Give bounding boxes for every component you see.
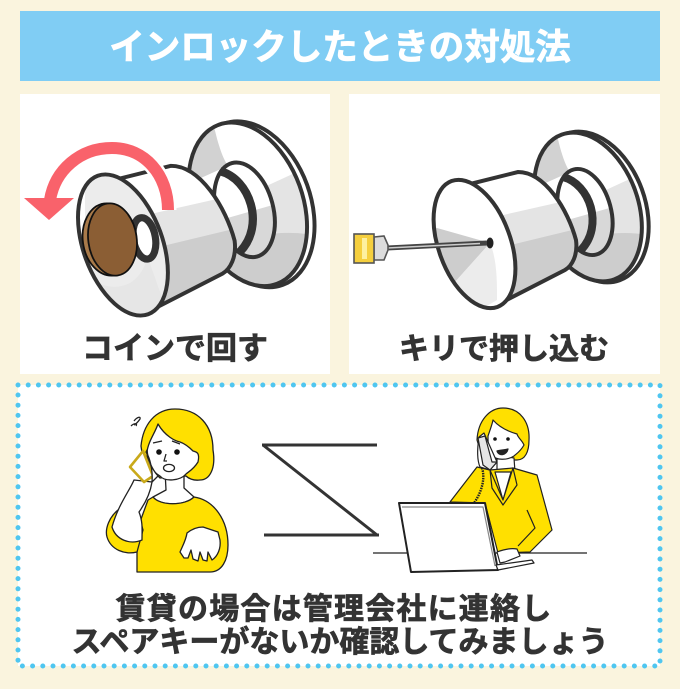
caption: coin: コインで回す xyxy=(82,331,268,366)
title banner xyxy=(20,11,660,81)
arrow: rotate counterclockwise xyxy=(24,148,168,220)
symbol: not equal Z mark xyxy=(262,445,379,535)
icon: awl xyxy=(354,234,494,263)
panel: landlord advice xyxy=(18,385,660,666)
instruction text: スペアキーがないか確認してみましょう xyxy=(72,625,608,659)
icon: door knob xyxy=(432,130,651,310)
instruction text xyxy=(72,593,608,659)
instruction text: 賃貸の場合は管理会社に連絡し xyxy=(116,593,552,626)
title: インロックしたときの対処法 xyxy=(109,27,571,67)
panel: coin method xyxy=(20,94,336,374)
coin xyxy=(78,200,142,279)
illustration: office worker on phone with laptop xyxy=(373,408,587,572)
illustration: worried woman on phone xyxy=(106,409,228,572)
panel: awl method xyxy=(349,94,669,374)
caption: awl: キリで押し込む xyxy=(399,333,609,366)
icon: door knob with coin xyxy=(76,119,316,318)
